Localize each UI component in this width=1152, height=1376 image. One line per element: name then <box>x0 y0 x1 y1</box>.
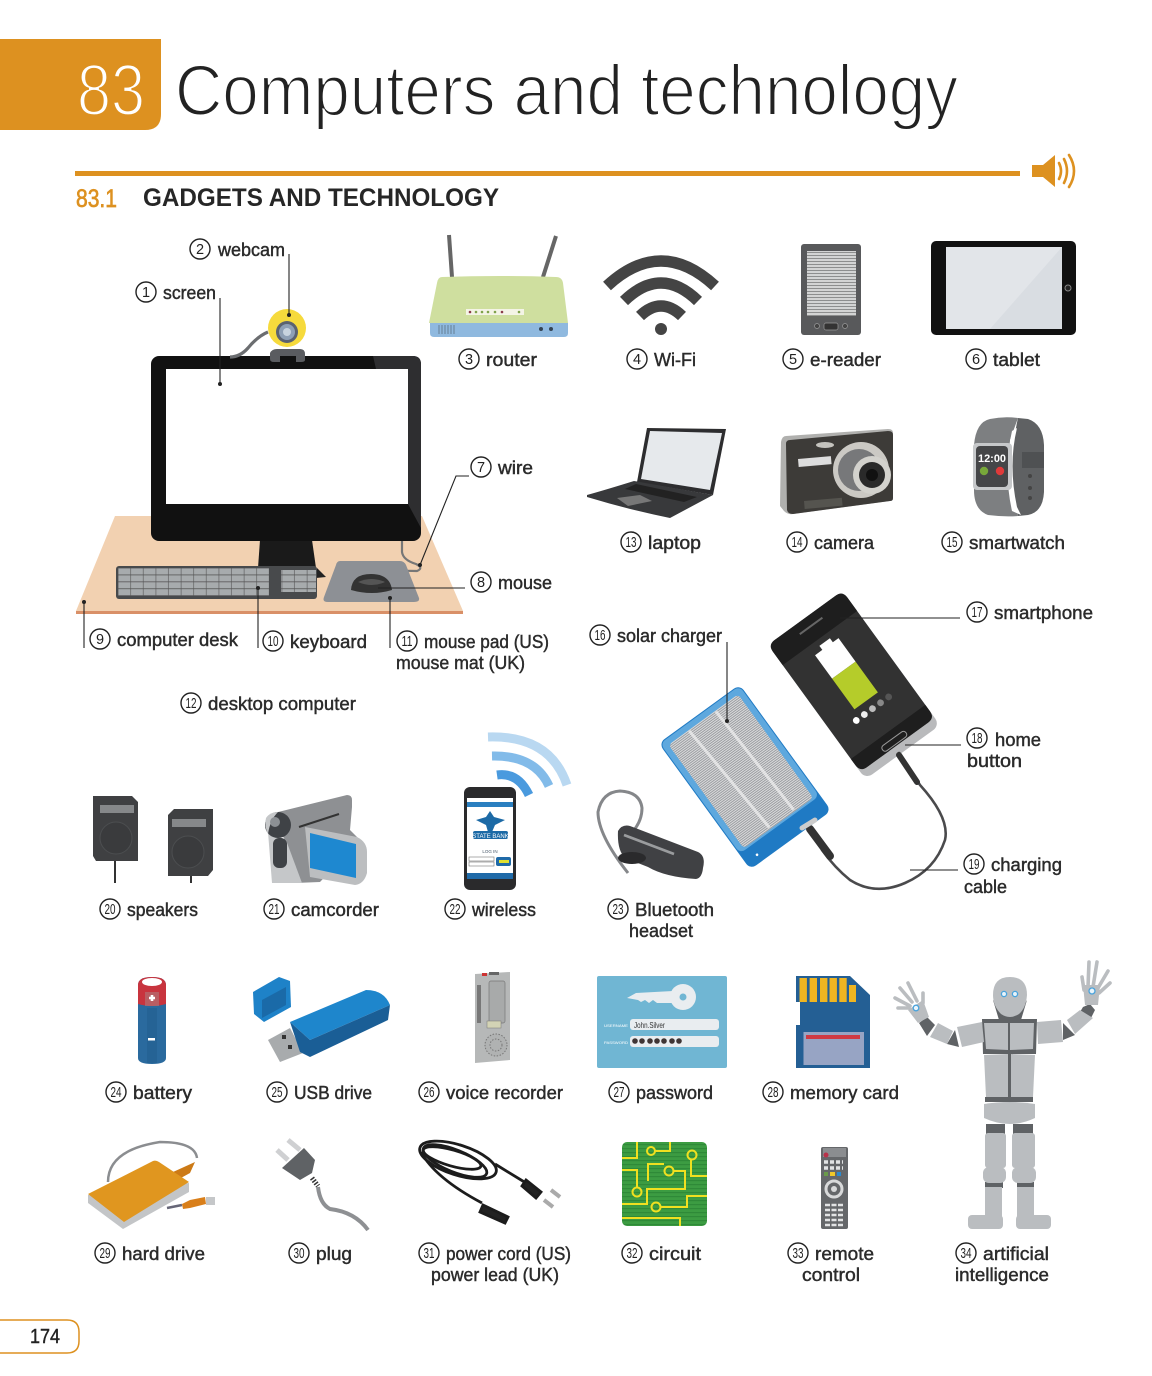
label: screen <box>136 282 216 303</box>
label: camera <box>787 532 875 553</box>
icon: password: John.Silver <box>634 1021 665 1030</box>
label: plug <box>289 1243 352 1264</box>
label: circuit: 32 <box>626 1246 638 1262</box>
icon: speakers <box>93 796 213 883</box>
leader dot: desk <box>82 600 86 604</box>
leader: desk <box>83 602 85 648</box>
icon: camcorder <box>265 795 367 885</box>
label: charging cable <box>964 854 1062 897</box>
label: router <box>459 349 537 370</box>
label: wire: wire <box>497 457 533 478</box>
icon: hard drive <box>88 1142 215 1229</box>
label: home button: 18 <box>972 731 982 747</box>
leader dot: wire <box>418 563 422 567</box>
label: solar charger: solar charger <box>617 625 722 646</box>
icon: circuit <box>622 1142 707 1226</box>
icon: memory card <box>796 976 870 1068</box>
robot body plates <box>908 977 1100 1229</box>
icon: artificial intelligence robot <box>895 962 1110 1229</box>
label: artificial intelligence: 34 <box>960 1246 972 1262</box>
label: Bluetooth headset <box>608 899 714 941</box>
label: memory card: memory card <box>790 1082 899 1103</box>
label: power cord <box>419 1243 571 1285</box>
leader: smartphone <box>840 617 960 619</box>
robot joints <box>919 1000 1095 1188</box>
label: battery: 24 <box>110 1085 122 1101</box>
label: Bluetooth headset: headset <box>629 920 693 941</box>
label: speakers <box>100 899 198 920</box>
label: e-reader: e-reader <box>810 349 881 370</box>
icon: password: PASSWORD <box>604 1040 628 1045</box>
label: power cord: power lead (UK) <box>431 1264 559 1285</box>
title: Computers and technology <box>175 52 958 131</box>
label: router: router <box>486 349 537 370</box>
icon: wireless phone <box>464 737 567 890</box>
illustration: desktop computer on desk <box>76 309 463 614</box>
label: webcam: webcam <box>217 239 285 260</box>
label: remote control <box>788 1243 874 1285</box>
label: remote control: control <box>802 1264 860 1285</box>
icon: power cord <box>415 1133 560 1223</box>
label: hard drive: hard drive <box>122 1243 205 1264</box>
label: plug: plug <box>316 1243 352 1264</box>
icon: smartphone <box>768 591 940 779</box>
icon: wi-fi <box>607 261 715 335</box>
label: wire: 7 <box>477 460 485 476</box>
label: battery <box>106 1082 193 1103</box>
label: smartwatch: smartwatch <box>969 532 1065 553</box>
label: wireless: wireless <box>471 899 536 920</box>
section rule <box>75 171 1020 176</box>
label: keyboard: keyboard <box>290 631 367 652</box>
label: wireless: 22 <box>450 902 460 918</box>
label: camera: camera <box>814 532 875 553</box>
label: wire <box>471 457 533 478</box>
icon: USB drive <box>253 977 390 1062</box>
icon: laptop <box>587 428 726 518</box>
label: artificial intelligence: intelligence <box>955 1264 1049 1285</box>
label: memory card: 28 <box>768 1085 778 1101</box>
label: mouse: mouse <box>498 572 552 593</box>
label: webcam <box>190 239 285 260</box>
icon: smartwatch <box>973 417 1044 516</box>
label: smartphone: 17 <box>972 605 982 621</box>
label: camera: 14 <box>792 535 802 551</box>
label: computer desk: computer desk <box>117 629 239 650</box>
leader: home button <box>905 744 961 746</box>
label: mouse: 8 <box>477 575 485 591</box>
leader: mouse pad <box>389 598 391 648</box>
label: screen: screen <box>163 282 216 303</box>
chapter number tab: 83 <box>77 51 145 131</box>
label: Bluetooth headset: 23 <box>612 902 624 918</box>
label: mouse pad: 11 <box>402 634 412 650</box>
label: remote control: 33 <box>792 1246 804 1262</box>
label: remote control: remote <box>815 1243 874 1264</box>
label: voice recorder: voice recorder <box>446 1082 563 1103</box>
page number tab: 174 <box>30 1326 60 1348</box>
label: Bluetooth headset: Bluetooth <box>635 899 714 920</box>
robot fingers <box>895 962 1110 1008</box>
label: e-reader: 5 <box>789 352 797 368</box>
robot eyes and hand lights <box>913 988 1095 1011</box>
leader dot: webcam <box>287 313 291 317</box>
label: laptop: 13 <box>626 535 636 551</box>
icon: password: USERNAME <box>604 1023 628 1028</box>
section heading: GADGETS AND TECHNOLOGY <box>143 184 499 212</box>
mouse <box>351 574 392 593</box>
label: camcorder: 21 <box>268 902 280 918</box>
label: power cord: 31 <box>424 1246 434 1262</box>
chapter number tab <box>0 39 161 131</box>
monitor stand <box>258 540 316 568</box>
label: wireless <box>445 899 536 920</box>
monitor <box>151 356 421 541</box>
icon: plug <box>277 1140 368 1230</box>
leader dot: solar charger <box>725 719 729 723</box>
label: mouse pad <box>396 631 549 673</box>
icon: battery <box>138 977 166 1064</box>
icon: voice recorder <box>475 972 510 1063</box>
label: solar charger: 16 <box>594 628 606 644</box>
icon: solar charger <box>659 685 831 869</box>
label: smartphone: smartphone <box>994 602 1093 623</box>
label: smartwatch: 15 <box>946 535 958 551</box>
leader: charging cable <box>910 869 958 871</box>
leader dot: mouse pad <box>388 596 392 600</box>
label: speakers: 20 <box>104 902 116 918</box>
icon: camera <box>780 429 893 514</box>
leader: mouse <box>378 587 465 589</box>
webcam <box>230 309 306 362</box>
keyboard <box>116 566 326 599</box>
label: mouse pad: mouse mat (UK) <box>396 652 525 673</box>
label: battery: battery <box>133 1082 193 1103</box>
label: desktop computer: 12 <box>186 696 196 712</box>
label: password: 27 <box>614 1085 624 1101</box>
label: USB drive: 25 <box>272 1085 282 1101</box>
label: USB drive: USB drive <box>294 1082 372 1103</box>
label: artificial intelligence: artificial <box>983 1243 1049 1264</box>
label: speakers: speakers <box>127 899 198 920</box>
icon: audio speaker <box>1032 155 1074 187</box>
page number tab <box>0 1320 79 1353</box>
icon: wireless phone: LOG IN <box>482 849 498 854</box>
label: voice recorder: 26 <box>424 1085 434 1101</box>
label: power cord: power cord (US) <box>446 1243 571 1264</box>
label: charging cable: charging <box>991 854 1062 875</box>
label: wi-fi: Wi-Fi <box>654 349 696 370</box>
label: laptop: laptop <box>648 532 701 553</box>
label: password: password <box>636 1082 713 1103</box>
label: screen: 1 <box>142 285 150 301</box>
label: mouse <box>471 572 552 593</box>
label: camcorder: camcorder <box>291 899 379 920</box>
label: circuit <box>622 1243 701 1264</box>
leader: wire <box>420 476 469 565</box>
leader: keyboard <box>257 588 259 648</box>
icon: e-reader <box>801 244 861 335</box>
label: tablet: tablet <box>993 349 1040 370</box>
screen <box>166 369 408 504</box>
label: laptop <box>621 532 701 553</box>
leader: solar charger <box>726 642 728 721</box>
label: circuit: circuit <box>649 1243 701 1264</box>
section number: 83.1 <box>76 185 117 213</box>
icon: password <box>597 976 727 1068</box>
label: router: 3 <box>465 352 473 368</box>
icon: Bluetooth headset <box>598 791 704 879</box>
label: home button: home <box>995 729 1041 750</box>
label: wi-fi: 4 <box>633 352 641 368</box>
label: plug: 30 <box>294 1246 304 1262</box>
label: tablet <box>966 349 1040 370</box>
label: home button: button <box>967 750 1022 771</box>
label: webcam: 2 <box>196 242 204 258</box>
label: tablet: 6 <box>972 352 980 368</box>
mouse pad <box>324 561 419 602</box>
icon: wireless phone: STATE BANK <box>472 834 509 840</box>
label: mouse pad: mouse pad (US) <box>424 631 549 652</box>
leader dot: keyboard <box>256 586 260 590</box>
leader: webcam <box>288 254 290 315</box>
label: hard drive: 29 <box>100 1246 110 1262</box>
leader dot: screen <box>218 382 222 386</box>
computer desk <box>76 516 463 614</box>
label: computer desk: 9 <box>96 632 104 648</box>
icon: smartwatch: 12:00 <box>978 453 1006 465</box>
label: wi-fi <box>627 349 696 370</box>
wire <box>372 541 420 574</box>
leader: screen <box>219 298 221 384</box>
label: home button <box>967 728 1041 771</box>
label: desktop computer: desktop computer <box>208 693 356 714</box>
icon: tablet <box>931 241 1076 335</box>
icon: charging cable <box>802 753 946 889</box>
label: keyboard: 10 <box>268 634 278 650</box>
icon: remote control <box>821 1147 848 1229</box>
label: charging cable: 19 <box>968 857 980 873</box>
label: charging cable: cable <box>964 876 1007 897</box>
label: artificial intelligence <box>955 1243 1049 1285</box>
icon: router <box>429 235 568 337</box>
